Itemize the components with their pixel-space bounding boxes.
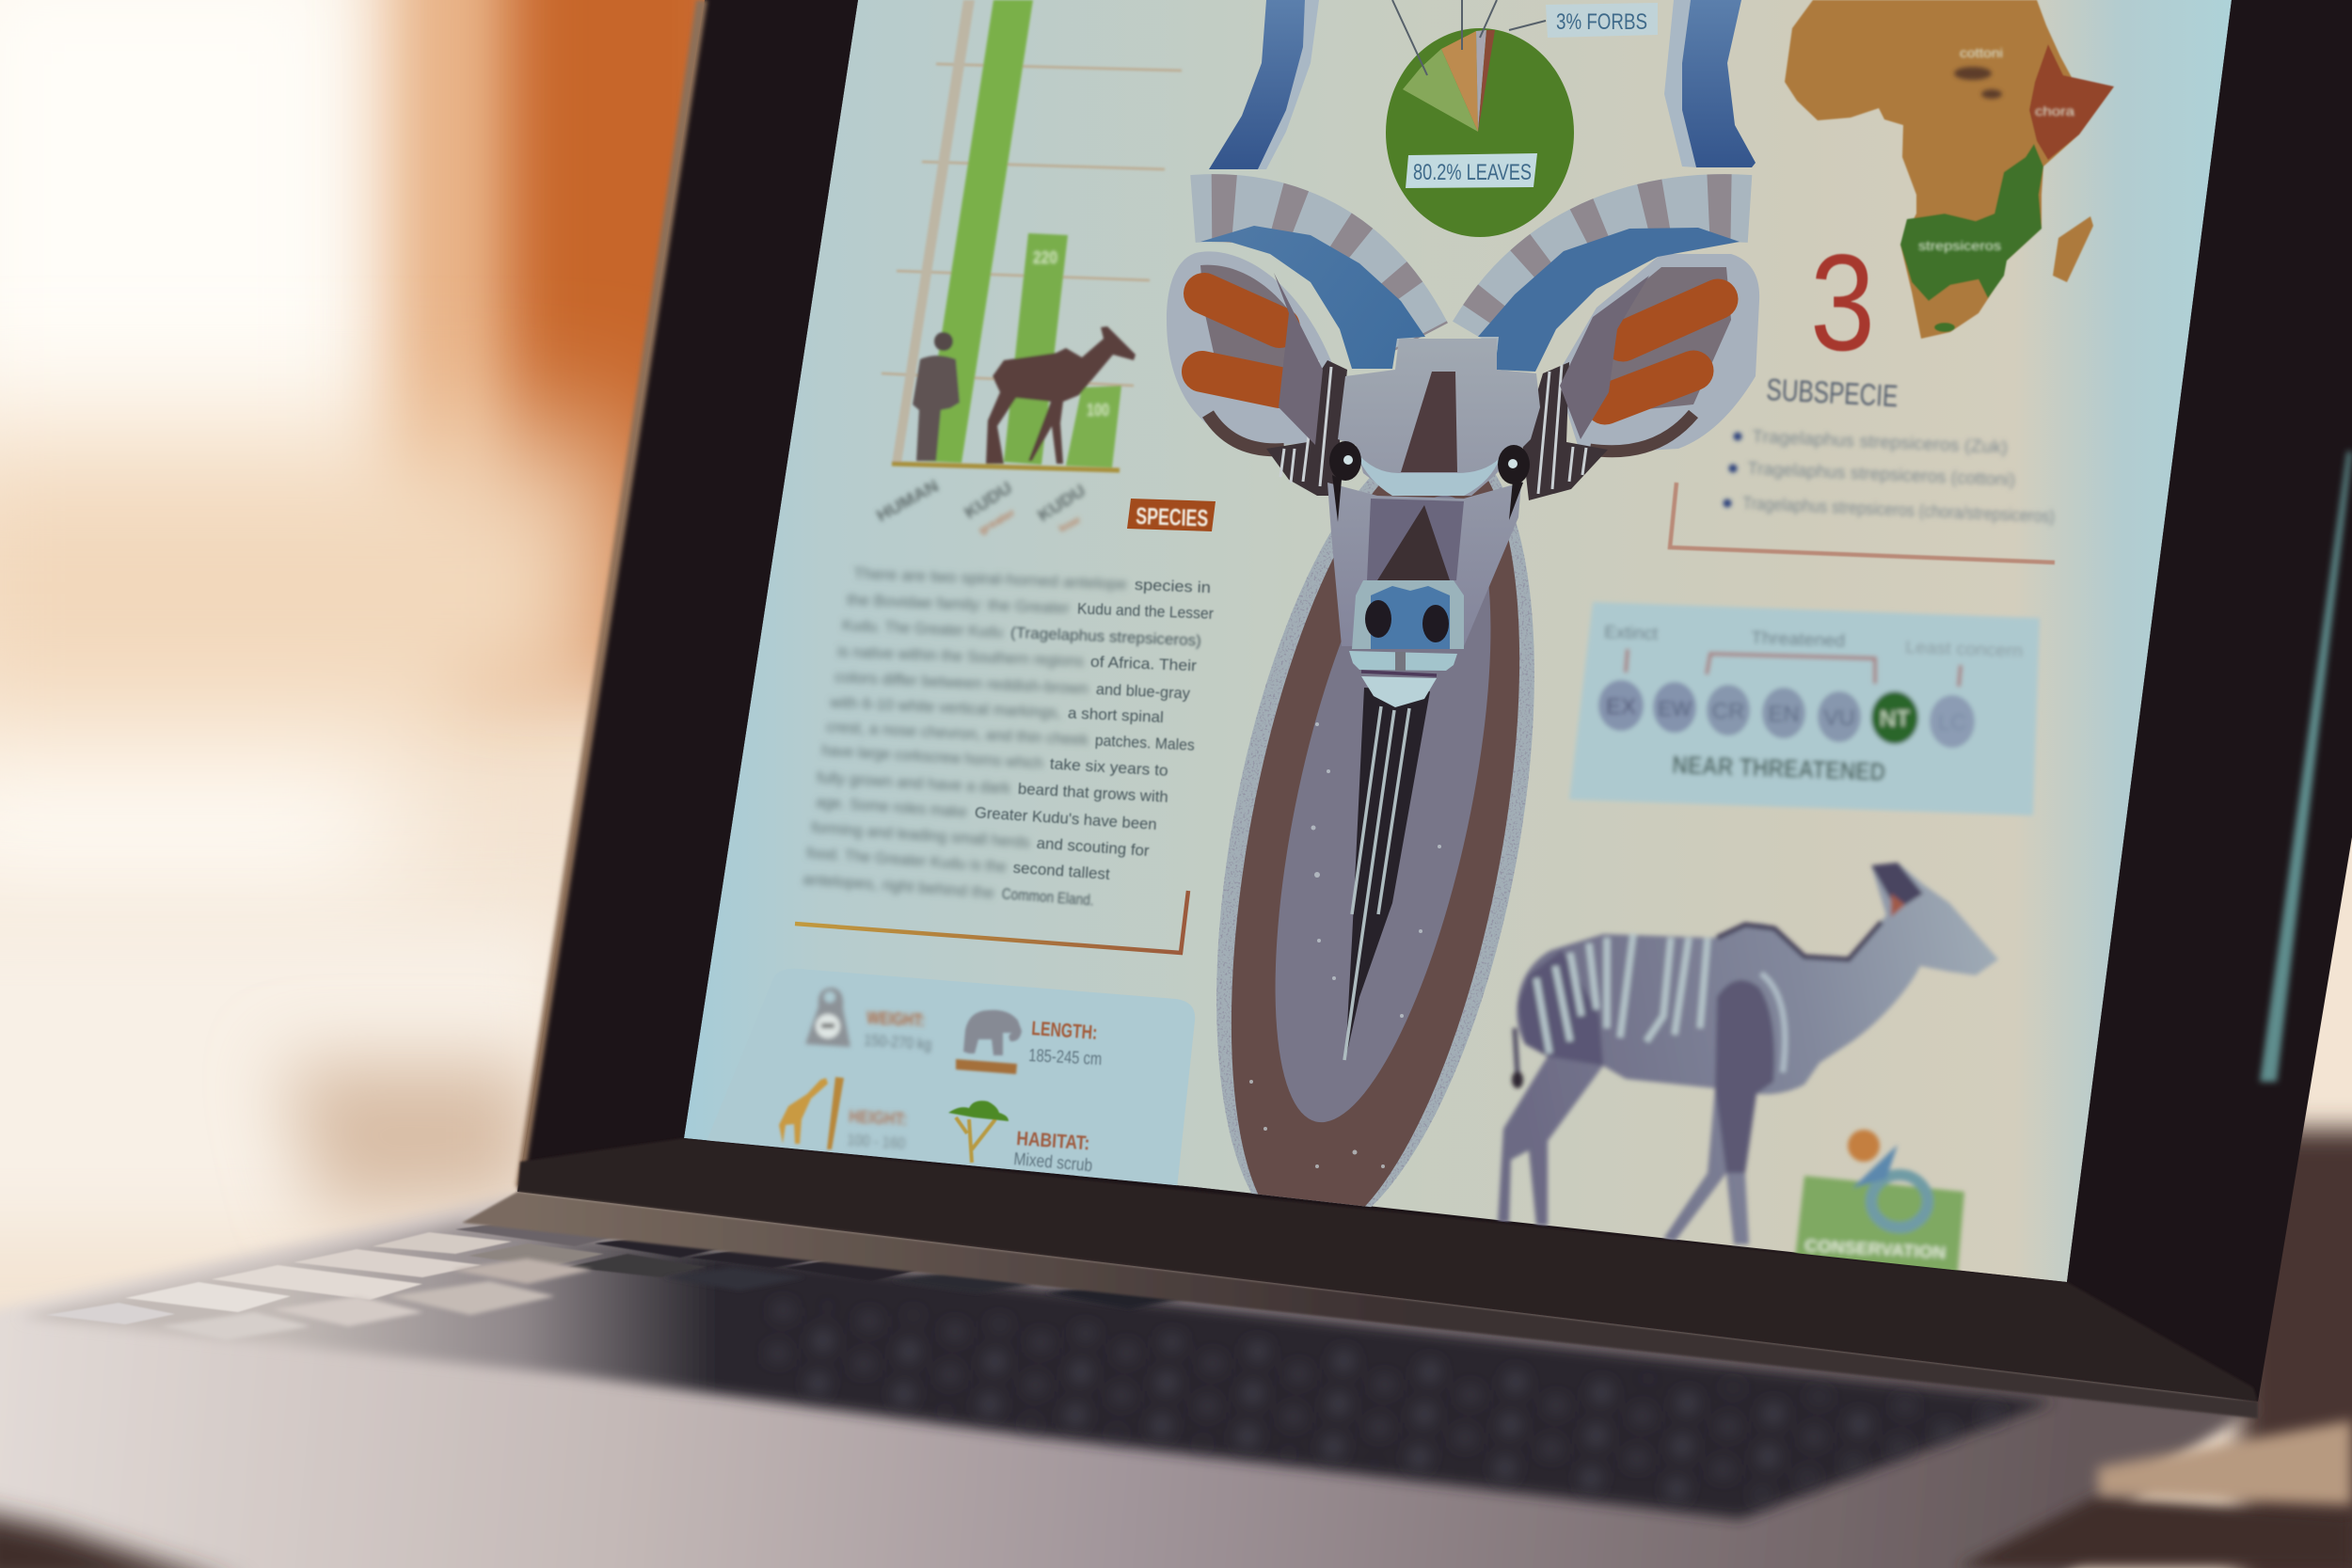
lower face	[1327, 483, 1521, 646]
label: leaves: 80.2% LEAVES	[1413, 160, 1532, 185]
chart axis labels: KUDU	[961, 478, 1015, 522]
status name: NEAR THREATENED	[1672, 751, 1886, 786]
body text: have large corkscrew horns which	[821, 741, 1043, 772]
body text: is native within the Southern regions	[837, 642, 1084, 671]
laptop lid and bezel	[462, 0, 2352, 1418]
hinge strip	[462, 1192, 2258, 1418]
chart axis labels	[873, 476, 1089, 537]
nose	[1371, 586, 1450, 649]
body text: second tallest	[1012, 859, 1111, 883]
status labels: Threatened	[1751, 628, 1845, 651]
bar values: 220	[1033, 248, 1057, 267]
body text: crest, a nose chevron, and thin cheek	[826, 718, 1089, 749]
ear and head accents	[1871, 863, 1923, 911]
habitat text: HABITAT:	[1016, 1128, 1090, 1154]
status circles	[1598, 680, 1975, 748]
length text: 185-245 cm	[1028, 1046, 1103, 1069]
species tag: SPECIES	[1136, 503, 1209, 532]
body text: with 6-10 white vertical markings,	[829, 693, 1061, 721]
lid silver edge	[516, 0, 707, 1187]
body text: fully grown and have a dark	[817, 768, 1011, 798]
status labels	[1604, 623, 2023, 661]
pie leader lines	[1392, 0, 1546, 75]
body text: patches. Males	[1094, 731, 1195, 754]
panel: facts	[696, 969, 1195, 1242]
status brackets	[1626, 649, 1961, 687]
pie chart	[1386, 0, 1658, 237]
body text: of Africa. Their	[1090, 653, 1198, 674]
label: forbs	[1546, 3, 1658, 38]
subspecies list: Tragelaphus strepsiceros (cottoni)	[1747, 459, 2015, 490]
map region: south	[1900, 144, 2043, 301]
body text: beard that grows with	[1017, 780, 1168, 806]
horn left	[1193, 0, 1425, 369]
human silhouette	[913, 332, 960, 461]
subspecies number: 3	[1810, 225, 1875, 379]
weight text: WEIGHT:	[866, 1008, 926, 1031]
lower bezel	[517, 1138, 2258, 1402]
ear bars right	[1605, 299, 1718, 404]
subspecies heading: SUBSPECIE	[1766, 372, 1899, 413]
keyboard	[20, 1218, 2055, 1519]
map labels: cottoni	[1960, 45, 2003, 60]
map: Africa	[1785, 0, 2114, 339]
table bottom left	[0, 1510, 245, 1568]
body text: Greater Kudu's have been	[974, 803, 1157, 833]
weight text: 150-270 kg	[864, 1031, 932, 1053]
rump shading	[1518, 950, 1603, 1066]
inner muzzle	[1367, 499, 1464, 580]
screen reflection strip	[2260, 451, 2352, 1082]
beard tip	[1361, 676, 1437, 707]
icon: elephant	[956, 1010, 1022, 1074]
habitat text: woodlands	[1023, 1172, 1090, 1197]
grid lines	[882, 64, 1182, 386]
text bracket	[795, 891, 1188, 953]
height text: 100 - 160	[847, 1131, 906, 1152]
illuminated keys	[46, 1218, 928, 1324]
kudu silhouette	[986, 326, 1136, 464]
body text: species in	[1135, 576, 1211, 596]
height text: HEIGHT:	[849, 1107, 908, 1130]
body text: and scouting for	[1036, 834, 1151, 860]
icon: weight	[805, 988, 850, 1047]
full body kudu illustration	[1498, 863, 1998, 1244]
label: leaves	[1406, 153, 1537, 188]
axis	[892, 0, 975, 464]
chart axis labels: HUMAN	[873, 476, 942, 525]
label: forbs: 3% FORBS	[1556, 9, 1647, 35]
neck stripes	[1344, 688, 1430, 1060]
body text: take six years to	[1049, 754, 1168, 780]
eye right	[1498, 445, 1530, 520]
chart axis labels: KUDU	[1034, 481, 1089, 525]
body text: the Bovidae family: the Greater	[847, 591, 1071, 617]
status circles: NT	[1880, 706, 1910, 732]
ear stripes	[1266, 360, 1347, 496]
map labels: strepsiceros	[1918, 238, 2001, 253]
forehead blaze	[1401, 372, 1457, 472]
body text: food. The Greater Kudu is the	[806, 844, 1008, 876]
map region: north east	[2029, 44, 2114, 160]
height text	[847, 1107, 908, 1152]
bar: lesser kudu	[1066, 386, 1121, 467]
body text: Kudu and the Lesser	[1077, 599, 1215, 623]
icon: giraffe and height pole	[779, 1077, 844, 1149]
status labels: Extinct	[1604, 623, 1659, 644]
status circles: EX	[1606, 694, 1636, 720]
ear left	[1167, 251, 1347, 496]
status labels: Least concern	[1905, 638, 2023, 661]
nostrils	[1365, 600, 1449, 642]
status circles: EW	[1658, 697, 1692, 721]
bar chart: species height	[882, 0, 1182, 470]
body text: colors differ between reddish-brown	[834, 668, 1089, 698]
laptop deck	[0, 1196, 2352, 1568]
bar: greater kudu	[1004, 233, 1068, 465]
tail	[1512, 1028, 1523, 1088]
status circles: LC	[1938, 710, 1966, 736]
status circles: VU	[1823, 705, 1855, 731]
body text: Common Eland.	[1001, 885, 1094, 910]
shoulder and front leg shading	[1715, 980, 1774, 1173]
table bottom right	[1957, 1496, 2352, 1568]
species tag	[1127, 499, 1216, 532]
subspecies bracket	[1670, 483, 2055, 562]
forehead	[1338, 339, 1540, 496]
habitat text	[1013, 1128, 1093, 1197]
ear right	[1522, 254, 1759, 500]
length text: LENGTH:	[1031, 1018, 1098, 1044]
bar: tall	[922, 0, 1033, 463]
bar values	[1033, 248, 1109, 420]
light patch on the table edge	[2098, 1420, 2352, 1505]
subspecies list: Tragelaphus strepsiceros (Zuk)	[1752, 427, 2008, 458]
body text	[803, 564, 1215, 910]
body text: antelopes, right behind the	[803, 870, 995, 902]
ear stripes	[1522, 362, 1608, 500]
status circles: EN	[1768, 702, 1800, 727]
weight text	[864, 1008, 932, 1053]
body text: forming and leading small herds	[811, 818, 1030, 851]
subspecies list	[1724, 427, 2055, 527]
chart baseline	[892, 464, 1120, 470]
screen with infographic page	[684, 0, 2232, 1303]
panel: conservation status	[1569, 602, 2040, 816]
chart axis labels: lesser	[1057, 515, 1083, 535]
eye left	[1329, 441, 1361, 522]
ear bars left	[1202, 293, 1279, 388]
chart axis labels: greater	[977, 507, 1018, 537]
chin	[1349, 651, 1457, 671]
body text: Kudu. The Greater Kudu	[842, 616, 1003, 641]
map labels: chora	[2035, 103, 2074, 119]
logo name: CONSERVATION	[1804, 1236, 1947, 1262]
body text: age. Some roles make	[816, 793, 968, 821]
body stripes	[1536, 934, 1708, 1053]
horn right	[1478, 0, 1756, 372]
body text: a short spinal	[1068, 704, 1164, 726]
brow crescent	[1356, 451, 1500, 496]
body text: There are two spiral-horned antelope	[853, 564, 1127, 594]
neck	[1161, 412, 1590, 1262]
logo: conservation badge	[1792, 1130, 1964, 1303]
length text	[1028, 1018, 1103, 1069]
kudu head illustration	[1161, 0, 1759, 1262]
back line	[1717, 922, 1882, 959]
body text: and blue-gray	[1096, 680, 1191, 703]
bar values: 100	[1087, 401, 1109, 420]
status circles: CR	[1712, 699, 1744, 724]
body text: (Tragelaphus strepsiceros)	[1010, 624, 1201, 650]
habitat text: Mixed scrub	[1013, 1149, 1093, 1176]
subspecies list: Tragelaphus strepsiceros (chora/strepsiceros)	[1742, 494, 2055, 527]
Madagascar	[2053, 216, 2093, 282]
icon: acacia tree	[948, 1101, 1009, 1163]
map labels	[1918, 45, 2074, 253]
nose block	[1352, 580, 1464, 649]
